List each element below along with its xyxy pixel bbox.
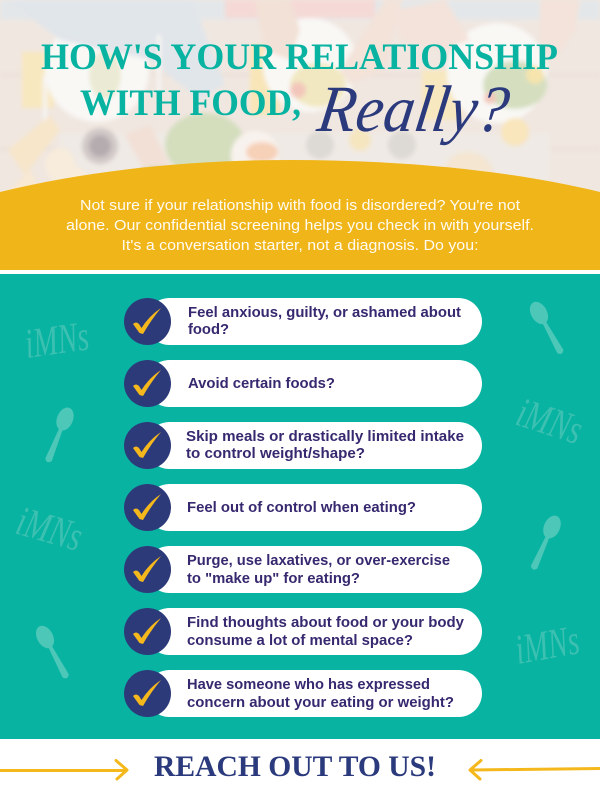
- item 6: Find thoughts about food or your body: [187, 615, 464, 631]
- item 1: [124, 298, 482, 345]
- item 3: Skip meals or drastically limited intake: [186, 429, 464, 445]
- intro text: Not sure if your relationship with food is disordered? You're not: [80, 197, 521, 214]
- arrow right-pointing: [0, 760, 127, 779]
- item 2: [124, 360, 482, 407]
- spoon icon left upper: [40, 405, 77, 465]
- intro text: alone. Our confidential screening helps you check in with yourself.: [66, 217, 534, 234]
- decorative spoons: [32, 299, 569, 682]
- item 7: concern about your eating or weight?: [187, 695, 454, 711]
- spoon icon right upper: [526, 299, 569, 358]
- spoon icon right lower: [526, 513, 564, 573]
- teal checklist panel: [0, 274, 600, 739]
- monogram left upper: iMNs: [22, 313, 92, 368]
- item 4: Feel out of control when eating?: [187, 500, 416, 516]
- item 7: [124, 670, 482, 717]
- item 4: [124, 484, 482, 531]
- script word Really: Really?: [313, 73, 514, 146]
- item 3: to control weight/shape?: [186, 446, 365, 462]
- item 6: [124, 608, 482, 655]
- checklist: [124, 298, 482, 717]
- white strip above teal panel: [0, 270, 600, 274]
- item 3: [124, 422, 482, 469]
- gold intro banner: [0, 160, 600, 270]
- arrow left-pointing: [470, 760, 600, 779]
- item 6: consume a lot of mental space?: [187, 633, 413, 649]
- item 7: Have someone who has expressed: [187, 677, 430, 693]
- item 2: Avoid certain foods?: [188, 376, 335, 392]
- spoon icon left lower: [32, 623, 74, 682]
- item 5: to "make up" for eating?: [187, 571, 360, 587]
- item 5: [124, 546, 482, 593]
- title: [41, 37, 558, 146]
- decorative monograms: [11, 313, 588, 674]
- monogram left lower: iMNs: [11, 498, 87, 561]
- background photo of shared meal: [0, 0, 600, 218]
- title line 1: HOW'S YOUR RELATIONSHIP: [41, 37, 558, 78]
- intro text: [66, 197, 534, 254]
- item 5: Purge, use laxatives, or over-exercise: [187, 553, 450, 569]
- item 1: Feel anxious, guilty, or ashamed about: [188, 305, 461, 321]
- call to action: REACH OUT TO US!: [154, 750, 436, 783]
- item 1: food?: [188, 322, 229, 338]
- intro text: It's a conversation starter, not a diagnosis. Do you:: [122, 237, 478, 254]
- title line 2: WITH FOOD,: [80, 83, 301, 124]
